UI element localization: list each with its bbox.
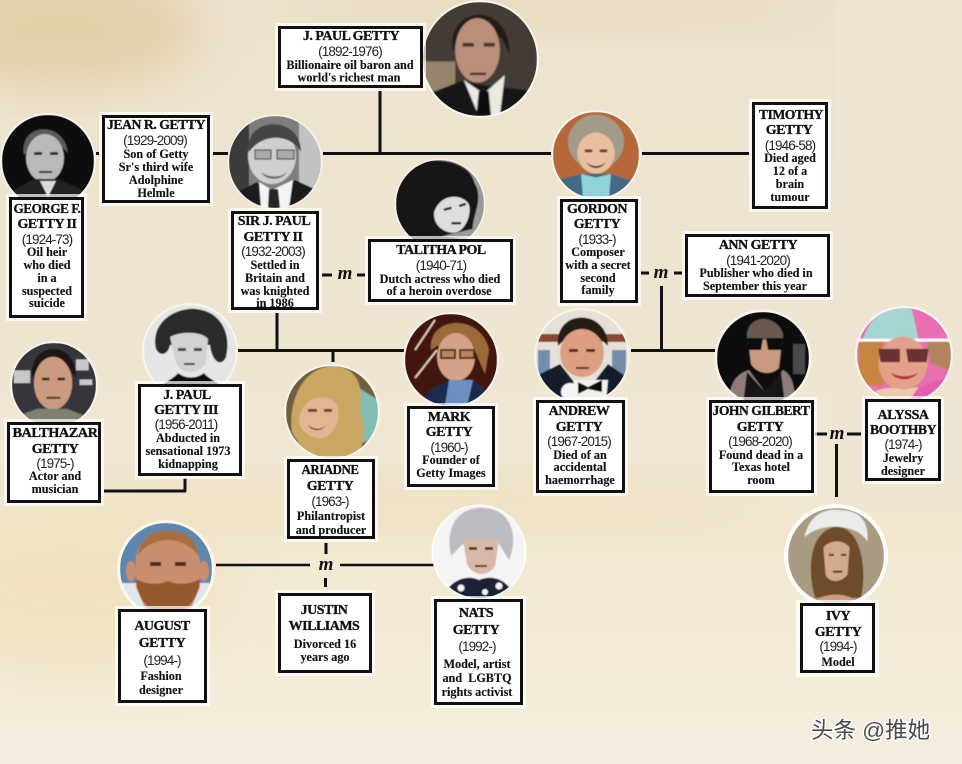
label: George F. Getty II: suspected [22,284,72,298]
person: Jean R. Getty: Son of Getty [124,147,188,161]
person: Jean R. Getty: Adolphine [129,173,184,187]
person: Ariadne Getty [284,364,380,542]
label: Balthazar Getty [4,419,104,506]
label: George F. Getty II: suicide [29,296,66,310]
label: Nats Getty: and LGBTQ [442,671,512,685]
connector lines [96,91,861,587]
person: Alyssa Boothby [855,306,953,484]
person: Gordon Getty [551,110,641,306]
label: Nats Getty: rights activist [442,685,512,699]
person: Justin Williams: WILLIAMS [289,619,360,634]
portrait: Mark Getty [403,312,499,408]
label: Ivy Getty: (1994-) [819,639,857,654]
label: Sir J. Paul Getty II: in 1986 [256,296,294,310]
label: George F. Getty II: GEORGE F. [14,202,80,217]
marriage marks [319,262,844,575]
label: August Getty: designer [139,683,184,697]
label: J. Paul Getty III: Abducted in [156,431,220,445]
portrait: J. Paul Getty III [142,303,238,384]
person: Jean R. Getty: Helmle [137,186,175,200]
label: Sir J. Paul Getty II: was knighted [241,284,310,298]
person: Jean R. Getty [99,112,213,206]
person: John Gilbert Getty [706,310,817,496]
person: Timothy Getty: Died aged [764,151,816,165]
label: Gordon Getty: GORDON [567,202,627,217]
label: J. Paul Getty [275,23,426,91]
label: Ariadne Getty: GETTY [307,479,354,494]
label: Nats Getty [431,596,526,708]
label: Andrew Getty [533,397,628,496]
label: Gordon Getty: family [581,283,615,297]
person: Ivy Getty [784,504,888,677]
person: George F. Getty II [0,113,96,321]
label: Talitha Pol: TALITHA POL [396,243,486,258]
person: Sir J. Paul Getty II [228,114,322,313]
label: John Gilbert Getty: JOHN GILBERT [712,404,811,419]
label: Ivy Getty: IVY [826,609,850,624]
label: Gordon Getty: with a secret [565,258,631,272]
label: Mark Getty [404,403,498,490]
label: Talitha Pol: (1940-71) [416,258,467,273]
label: Balthazar Getty: musician [32,482,79,496]
person: Timothy Getty: (1946-58) [765,138,816,153]
person: J. Paul Getty III [135,303,245,479]
label: Sir J. Paul Getty II: Settled in [250,258,300,272]
portrait: Ariadne Getty [284,364,380,460]
marriage marks: m [338,263,352,284]
portrait: Gordon Getty [551,110,641,200]
portrait: Andrew Getty [534,308,630,404]
label: Talitha Pol: Dutch actress who died [380,272,501,286]
label: Talitha Pol [365,236,516,305]
label: J. Paul Getty III: GETTY III [154,403,218,418]
label: Sir J. Paul Getty II [228,208,322,313]
portrait: August Getty [117,520,215,618]
label: J. Paul Getty III [135,381,245,479]
label: George F. Getty II: in a [37,271,57,285]
label: Andrew Getty: haemorrhage [545,473,615,487]
person: Talitha Pol [365,158,516,305]
person: Justin Williams: Divorced 16 [294,637,356,651]
label: Talitha Pol: of a heroin overdose [386,284,492,298]
person: Justin Williams: years ago [300,650,350,664]
person: Jean R. Getty: JEAN R. GETTY [107,118,205,133]
label: August Getty: (1994-) [143,653,181,668]
label: Gordon Getty: second [580,271,616,285]
label: Mark Getty: MARK [428,410,471,425]
label: Balthazar Getty: BALTHAZAR [12,426,99,441]
label: John Gilbert Getty: GETTY [737,420,784,435]
label: John Gilbert Getty: Found dead in a [719,448,803,462]
label: Ariadne Getty: ARIADNE [302,463,359,478]
label: Nats Getty: NATS [459,606,494,621]
label: Nats Getty: Model, artist [443,657,511,671]
person: Ann Getty: (1941-2020) [726,253,790,268]
label: George F. Getty II: (1924-73) [22,232,73,247]
person: August Getty [115,520,215,706]
label: Andrew Getty: Died of an [553,448,607,462]
portrait: Ivy Getty [784,504,888,608]
portrait: John Gilbert Getty [714,310,812,406]
label: John Gilbert Getty: (1968-2020) [728,434,792,449]
label: Andrew Getty: accidental [554,460,607,474]
label: George F. Getty II [6,194,87,321]
label: Mark Getty: GETTY [426,425,473,440]
label: John Gilbert Getty: room [747,473,775,487]
watermark: 头条 @推她 [811,718,930,743]
label: J. Paul Getty III: sensational 1973 [146,444,230,458]
marriage marks: m [830,423,844,444]
label: August Getty: Fashion [140,669,182,683]
label: Alyssa Boothby [862,396,944,484]
person: Balthazar Getty [4,341,104,506]
label: Ariadne Getty: Philantropist [297,509,365,523]
label: Gordon Getty [557,196,641,306]
label: J. Paul Getty: world's richest man [298,70,401,84]
label: George F. Getty II: who died [23,258,71,272]
label: Alyssa Boothby: Jewelry [883,451,923,465]
portrait: Balthazar Getty [10,341,98,429]
person: Jean R. Getty: Sr's third wife [119,160,194,174]
person: Timothy Getty: 12 of a [773,164,807,178]
label: John Gilbert Getty [706,397,817,496]
label: Andrew Getty: (1967-2015) [547,434,611,449]
portrait: Alyssa Boothby [855,306,953,404]
label: Ivy Getty [796,600,879,677]
label: Balthazar Getty: Actor and [29,469,81,483]
label: Alyssa Boothby: (1974-) [884,437,922,452]
label: Alyssa Boothby: designer [881,464,926,478]
marriage marks: m [654,262,668,283]
label: August Getty: GETTY [139,636,186,651]
label: Sir J. Paul Getty II: SIR J. PAUL [238,214,310,229]
portrait: George F. Getty II [0,113,96,197]
person: J. Paul Getty [275,0,539,118]
portrait: J. Paul Getty [421,0,539,118]
label: Gordon Getty: (1933-) [578,232,616,247]
label: Ivy Getty: GETTY [815,625,862,640]
person: Timothy Getty: brain [776,177,804,191]
label: Balthazar Getty: (1975-) [36,456,74,471]
label: Ariadne Getty [284,456,378,542]
label: Andrew Getty: GETTY [556,420,603,435]
label: Gordon Getty: Composer [571,245,625,259]
label: Mark Getty: (1960-) [430,440,468,455]
person: Andrew Getty [533,308,630,496]
person: Timothy Getty: TIMOTHY [759,108,823,123]
label: John Gilbert Getty: Texas hotel [732,460,791,474]
person: Timothy Getty: GETTY [766,123,813,138]
person: Ann Getty: Publisher who died in [699,266,813,280]
portrait: Talitha Pol [394,158,486,239]
label: August Getty [115,606,210,706]
label: J. Paul Getty III: (1956-2011) [155,417,218,432]
label: Alyssa Boothby: BOOTHBY [870,423,936,438]
person: Ann Getty: ANN GETTY [719,238,798,253]
label: Sir J. Paul Getty II: Britain and [245,271,305,285]
label: Balthazar Getty: GETTY [32,442,79,457]
person: Ann Getty [682,231,833,300]
label: August Getty: AUGUST [134,619,191,634]
label: Sir J. Paul Getty II: (1932-2003) [241,244,305,259]
label: Andrew Getty: ANDREW [549,404,610,419]
person: Justin Williams: JUSTIN [301,603,348,618]
label: J. Paul Getty III: kidnapping [158,457,218,471]
label: Sir J. Paul Getty II: GETTY II [244,230,302,245]
label: J. Paul Getty: Billionaire oil baron and [286,58,414,72]
label: Alyssa Boothby: ALYSSA [878,408,930,423]
label: J. Paul Getty III: J. PAUL [163,388,211,403]
person: Nats Getty [431,504,526,708]
marriage marks: m [319,554,333,575]
label: George F. Getty II: Oil heir [27,245,68,259]
label: George F. Getty II: GETTY II [18,217,76,232]
label: Mark Getty: Founder of [422,453,481,467]
label: J. Paul Getty: (1892-1976) [318,44,382,59]
person: Timothy Getty [749,99,831,212]
label: J. Paul Getty: J. PAUL GETTY [303,29,400,44]
label: Mark Getty: Getty Images [416,466,486,480]
label: Nats Getty: (1992-) [458,639,496,654]
label: Gordon Getty: GETTY [574,217,621,232]
label: Ariadne Getty: and producer [296,523,367,537]
label: Ariadne Getty: (1963-) [311,494,349,509]
label: Ivy Getty: Model [821,655,855,669]
person: Jean R. Getty: (1929-2009) [123,133,187,148]
person: Justin Williams [275,590,375,676]
label: Nats Getty: GETTY [453,623,500,638]
person: Ann Getty: September this year [703,279,808,293]
portrait: Sir J. Paul Getty II [228,114,322,210]
person: Timothy Getty: tumour [770,190,810,204]
portrait: Nats Getty [432,504,526,600]
person: Mark Getty [403,312,499,490]
